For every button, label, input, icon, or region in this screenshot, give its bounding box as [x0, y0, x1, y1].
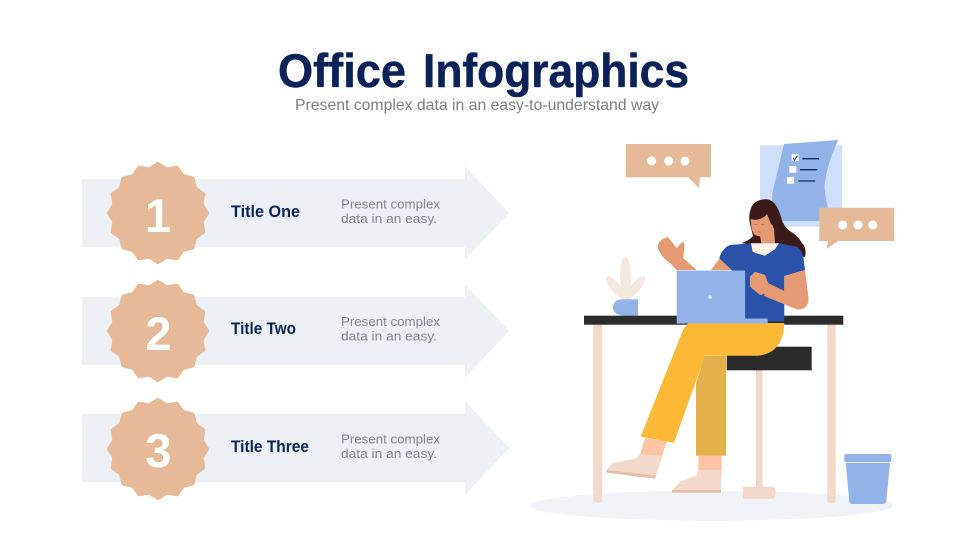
- title: [278, 44, 689, 97]
- arrow: step 1: [82, 166, 509, 260]
- number 3: 3: [145, 424, 172, 477]
- arrow: step 2: [82, 284, 509, 378]
- number 1: 1: [145, 189, 171, 242]
- title: Infographics: [423, 44, 689, 97]
- description: step 3: data in an easy.: [341, 446, 437, 461]
- description: step 3: Present complex: [341, 432, 440, 446]
- badge: step 3: [109, 400, 207, 498]
- description: step 1: [341, 196, 440, 226]
- neck and face: [750, 214, 775, 247]
- stool: [727, 347, 812, 499]
- number 2: 2: [145, 307, 172, 360]
- illustration: woman at office desk: [530, 140, 894, 521]
- waste bin: [844, 454, 891, 504]
- back leg: [696, 356, 726, 456]
- waving hand and forearm: [658, 237, 697, 270]
- arrow: step 3: [82, 401, 509, 495]
- heading: title three: Title Three: [231, 438, 309, 456]
- subtitle: Present complex data in an easy-to-understand way: [295, 97, 659, 114]
- title: Office: [278, 44, 406, 97]
- panel: step 2: [82, 282, 509, 380]
- back foot: [672, 456, 722, 493]
- speech bubble: left: [626, 144, 711, 188]
- desk legs: [593, 322, 836, 503]
- upper waving arm: [711, 258, 732, 270]
- hair: [742, 199, 806, 257]
- description: step 2: data in an easy.: [341, 328, 437, 344]
- laptop: [677, 270, 768, 324]
- description: step 1: Present complex: [341, 196, 440, 212]
- panel: step 3: [82, 400, 509, 498]
- description: step 2: Present complex: [341, 314, 440, 329]
- desk top: [584, 316, 843, 325]
- badge: step 1: [109, 164, 207, 262]
- front foot: [606, 438, 667, 479]
- heading: title one: Title One: [231, 203, 300, 221]
- front leg: [641, 323, 784, 443]
- speech bubble: right: [819, 208, 894, 249]
- description: step 3: [341, 432, 440, 461]
- icon: document with checklist: [760, 140, 842, 227]
- shirt: [719, 243, 805, 322]
- right arm and hand: [750, 270, 809, 310]
- panel: step 1: [82, 164, 509, 262]
- badge: step 2: [109, 282, 207, 380]
- ground shadow: [530, 491, 893, 521]
- description: step 1: data in an easy.: [341, 211, 437, 226]
- collar: [751, 243, 779, 256]
- description: step 2: [341, 314, 440, 344]
- plant: [606, 257, 645, 316]
- heading: title two: Title Two: [231, 320, 296, 338]
